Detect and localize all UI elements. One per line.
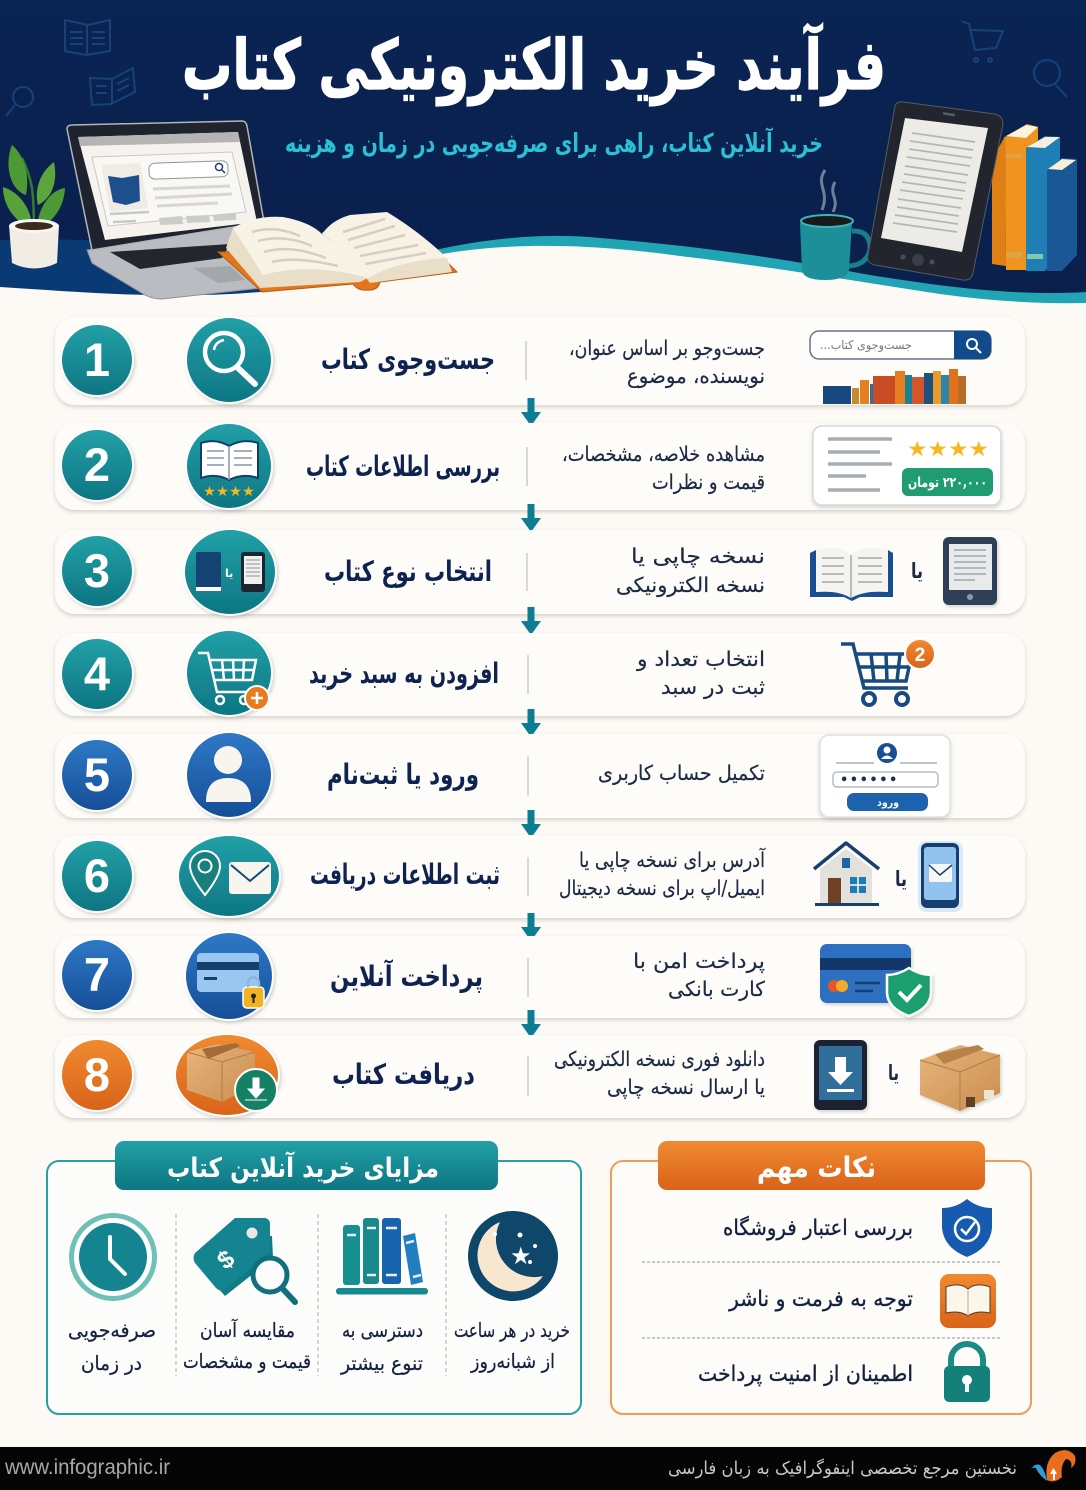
product card: ۲۲۰,۰۰۰ تومان xyxy=(908,475,987,491)
step description xyxy=(569,336,765,388)
or label: یا xyxy=(895,867,907,891)
benefit: any hour: خرید در هر ساعت xyxy=(454,1319,570,1342)
number 3 xyxy=(60,534,134,608)
icon: cardboard box xyxy=(920,1045,1000,1111)
arrow 3-4 xyxy=(521,607,541,635)
icon: bookshelf xyxy=(823,369,966,404)
benefit: variety: دسترسی به xyxy=(342,1319,423,1342)
step description: پرداخت امن با xyxy=(633,949,765,973)
tip: store credibility xyxy=(723,1199,992,1257)
illustration: open book xyxy=(218,212,457,292)
icon: cart with badge: 2 xyxy=(915,645,925,666)
panel: online purchase benefits xyxy=(47,1141,581,1414)
step description: قیمت و نظرات xyxy=(652,470,765,494)
step description: یا ارسال نسخه چاپی xyxy=(607,1075,765,1099)
arrow 2-3 xyxy=(521,504,541,532)
tip: format and publisher xyxy=(728,1274,996,1328)
benefit: any hour: از شبانه‌روز xyxy=(470,1350,555,1373)
icon: book and stars: ★★★★ xyxy=(203,484,255,500)
icon: card with lock xyxy=(185,932,273,1020)
step description: دانلود فوری نسخه الکترونیکی xyxy=(554,1047,765,1071)
step 8 row xyxy=(55,1034,1025,1118)
or label: یا xyxy=(911,559,923,583)
icon: house xyxy=(814,843,879,906)
tip: format and publisher: توجه به فرمت و ناشر xyxy=(728,1287,913,1312)
step description: ایمیل/اپ برای نسخه دیجیتال xyxy=(559,876,765,900)
benefits heading: مزایای خرید آنلاین کتاب xyxy=(167,1151,439,1184)
benefit: any hour: ★ xyxy=(510,1242,532,1270)
panel: important tips xyxy=(611,1141,1031,1414)
step 2 row xyxy=(55,423,1025,510)
benefit: compare prices xyxy=(183,1218,311,1373)
step description xyxy=(554,1047,765,1099)
step title: بررسی اطلاعات کتاب xyxy=(306,450,500,483)
step description: ثبت در سبد xyxy=(661,675,765,699)
step description: نسخه الکترونیکی xyxy=(616,573,765,597)
benefit: save time: صرفه‌جویی xyxy=(68,1319,156,1342)
illustration: books xyxy=(992,124,1077,271)
footer xyxy=(0,1447,1086,1490)
icon: phone with mail xyxy=(918,841,963,912)
step description: آدرس برای نسخه چاپی یا xyxy=(579,847,766,872)
benefit: save time xyxy=(68,1213,157,1375)
benefit: any hour xyxy=(454,1211,570,1373)
icon: user xyxy=(186,732,272,818)
icon: open book xyxy=(810,547,893,601)
icon: tablet download xyxy=(814,1040,867,1110)
login card: •••••• xyxy=(840,773,899,788)
step title: ثبت اطلاعات دریافت xyxy=(310,858,500,891)
step title: افزودن به سبد خرید xyxy=(309,657,499,690)
step title: انتخاب نوع کتاب xyxy=(324,555,492,588)
step description: انتخاب تعداد و xyxy=(636,647,765,671)
illustration: e-reader xyxy=(868,102,1003,280)
number 2: 2 xyxy=(84,438,110,491)
login card xyxy=(820,735,950,817)
step 4 row xyxy=(55,630,1025,716)
tip: store credibility: بررسی اعتبار فروشگاه xyxy=(723,1215,913,1241)
step description xyxy=(559,847,766,900)
or label: یا xyxy=(888,1061,899,1085)
arrow 6-7 xyxy=(521,913,541,941)
number 1: 1 xyxy=(84,333,110,386)
icon: cart with badge xyxy=(841,639,935,705)
number 6: 6 xyxy=(84,849,110,902)
number 1 xyxy=(60,323,134,397)
step 7 row xyxy=(55,932,1025,1020)
step 1 row xyxy=(55,317,1025,405)
number 2 xyxy=(60,428,134,502)
benefit: variety: تنوع بیشتر xyxy=(340,1352,423,1375)
benefit: compare prices: $ xyxy=(212,1245,240,1275)
step title: ورود یا ثبت‌نام xyxy=(327,758,479,791)
product card xyxy=(813,426,1001,505)
step description: نسخه چاپی یا xyxy=(631,544,765,568)
step description xyxy=(562,442,765,494)
icon: bank card with shield xyxy=(820,944,931,1016)
icon: cart with plus xyxy=(186,630,272,716)
number 6 xyxy=(60,839,134,913)
arrow 7-8 xyxy=(521,1010,541,1038)
benefit: compare prices: مقایسه آسان xyxy=(200,1318,295,1342)
product card: ★★★★ xyxy=(907,437,989,461)
website url: www.infographic.ir xyxy=(4,1456,170,1479)
arrow 4-5 xyxy=(521,709,541,737)
illustration: coffee cup xyxy=(800,170,870,280)
icon: book or e-reader xyxy=(184,529,276,615)
step title: جست‌وجوی کتاب xyxy=(321,343,495,376)
number 8: 8 xyxy=(84,1048,110,1101)
background icons xyxy=(6,20,1067,116)
login card: ورود xyxy=(877,797,899,809)
number 8 xyxy=(60,1038,134,1112)
arrow 1-2 xyxy=(521,398,541,426)
tips heading: نکات مهم xyxy=(757,1151,876,1184)
search bar xyxy=(810,331,991,359)
icon: pin and mail xyxy=(178,835,280,917)
subtitle: خرید آنلاین کتاب، راهی برای صرفه‌جویی در زمان و هزینه xyxy=(285,127,823,159)
step description: مشاهده خلاصه، مشخصات،‏ xyxy=(562,442,765,466)
benefit: compare prices: قیمت و مشخصات xyxy=(183,1350,311,1373)
tip: payment security xyxy=(698,1344,990,1402)
tips heading xyxy=(658,1141,985,1190)
tip: payment security: اطمینان از امنیت پرداخت xyxy=(698,1362,913,1387)
icon: book and stars xyxy=(186,423,272,509)
illustration: plant xyxy=(3,145,65,268)
benefit: variety xyxy=(336,1218,428,1375)
icon: book or e-reader: یا xyxy=(225,567,233,580)
benefits heading xyxy=(115,1141,498,1190)
icon: magnifier xyxy=(186,317,272,403)
number 7 xyxy=(60,938,134,1012)
number 5 xyxy=(60,738,134,812)
benefit: save time: در زمان xyxy=(81,1352,142,1375)
step description xyxy=(616,544,765,597)
arrow 5-6 xyxy=(521,810,541,838)
step description xyxy=(633,949,765,1001)
icon: e-reader xyxy=(943,537,997,605)
step description: جست‌وجو بر اساس عنوان،‏ xyxy=(569,336,765,360)
number 4 xyxy=(60,637,134,711)
logo xyxy=(1031,1450,1076,1481)
number 7: 7 xyxy=(84,948,110,1001)
step description: کارت بانکی xyxy=(668,977,765,1001)
step 3 row xyxy=(55,529,1025,615)
step title: دریافت کتاب xyxy=(332,1058,475,1091)
number 4: 4 xyxy=(84,647,110,700)
icon: parcel with download xyxy=(175,1034,279,1116)
step description: نویسنده، موضوع xyxy=(627,364,765,388)
step description xyxy=(636,647,765,699)
illustration: laptop xyxy=(67,121,264,299)
step 5 row xyxy=(55,732,1025,818)
step description: تکمیل حساب کاربری xyxy=(598,761,765,785)
wave: cream ground xyxy=(0,246,1086,320)
step title: پرداخت آنلاین xyxy=(330,959,483,993)
step 6 row xyxy=(55,835,1025,918)
wave: teal ribbon xyxy=(435,236,1086,305)
header banner xyxy=(0,0,1086,320)
tagline: نخستین مرجع تخصصی اینفوگرافیک به زبان فارسی xyxy=(668,1458,1017,1479)
number 5: 5 xyxy=(84,748,110,801)
number 3: 3 xyxy=(84,544,110,597)
search bar: جست‌وجوی کتاب...‏ xyxy=(820,338,912,353)
